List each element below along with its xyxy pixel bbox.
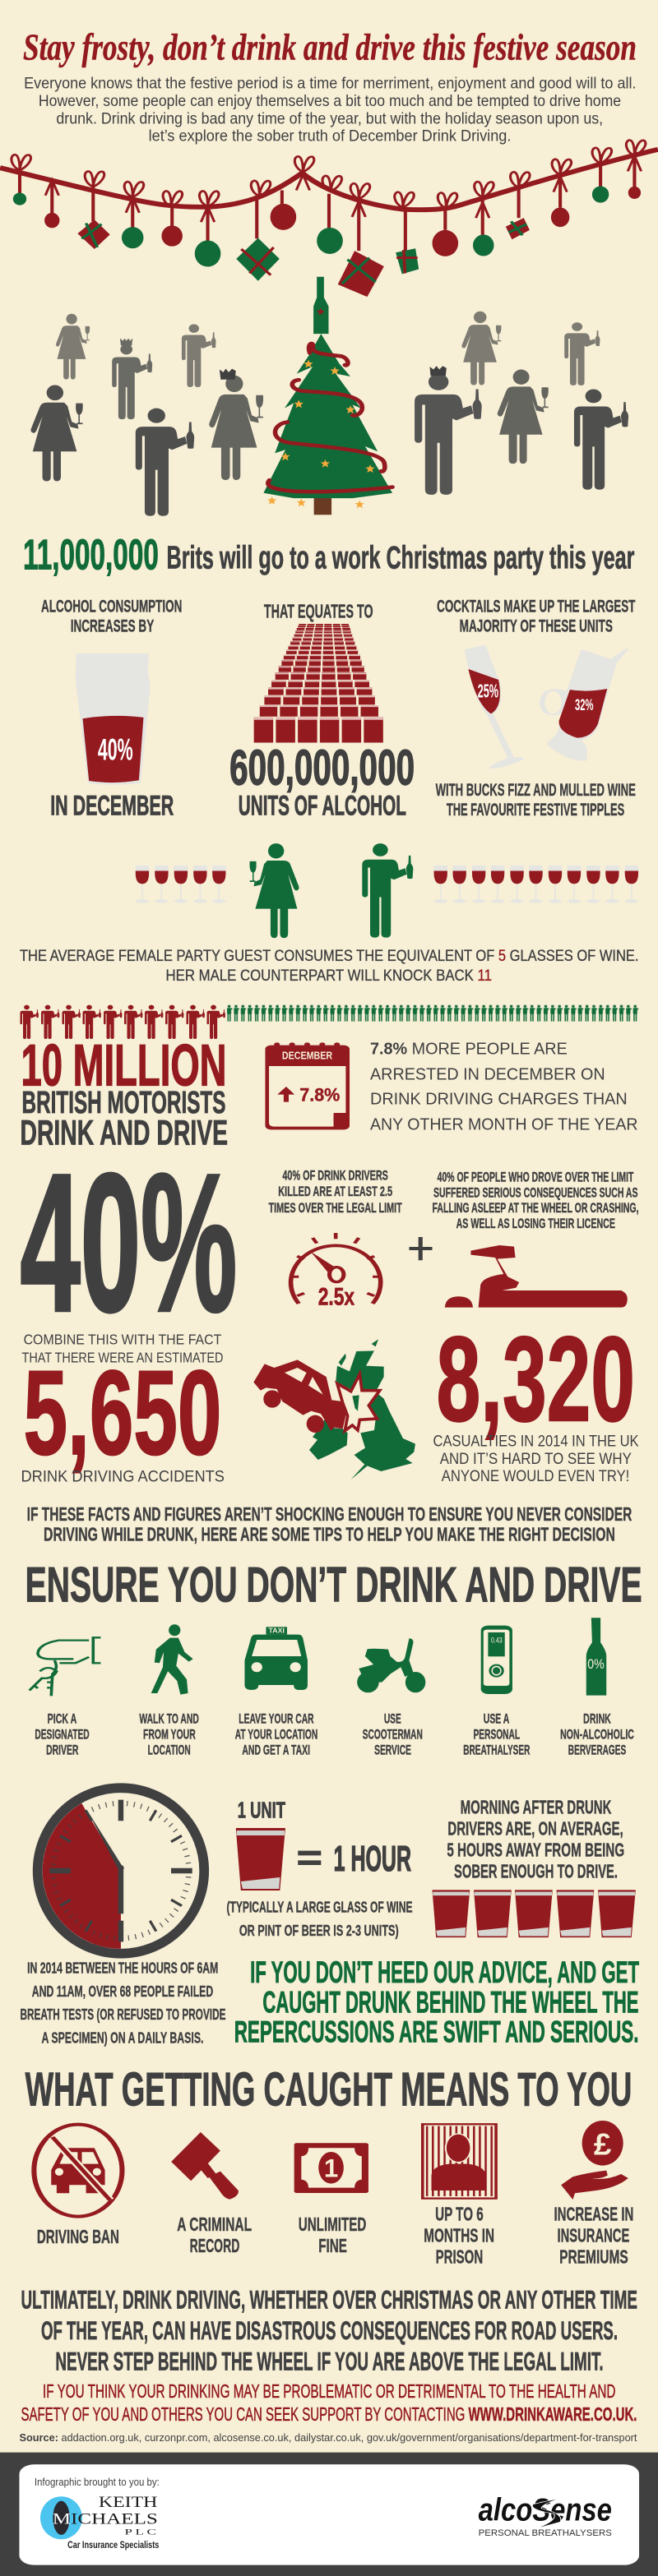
panel: clock and units: (TYPICALLY A LARGE GLASS OF WINE (227, 1899, 413, 1916)
row of 5 glasses (433, 1890, 636, 1937)
1 unit equals 1 hour: 1 UNIT (238, 1798, 285, 1823)
logo: Keith Michaels: MICHAELS (53, 2510, 158, 2528)
footer: Infographic brought to you by: (35, 2477, 160, 2488)
combine text: COMBINE THIS WITH THE FACT (24, 1331, 221, 1347)
tip: breathalyser (463, 1626, 531, 1757)
icon: insurance premium: £ (594, 2128, 611, 2162)
40% consequences text (433, 1170, 639, 1231)
panel: clock and units: IN 2014 BETWEEN THE HOURS OF 6AM (27, 1960, 218, 1977)
panel: consequences captions and closing: MONTHS IN (424, 2225, 494, 2246)
panel: consequences captions and closing: DRIVING BAN (37, 2227, 119, 2247)
column: alcohol consumption pint: INCREASES BY (71, 616, 154, 635)
people row: 10 million red, rest green (20, 1005, 639, 1039)
column: alcohol consumption pint: 40% (98, 732, 133, 766)
panel: party statistics (20, 531, 639, 985)
arrested text block: 7.8% MORE PEOPLE ARE (370, 1039, 568, 1058)
caption: unlimited fine (299, 2214, 366, 2256)
grid of cups (254, 625, 384, 730)
column: 600,000,000 units cups: THAT EQUATES TO (264, 602, 373, 622)
icon: december calendar: DECEMBER (282, 1050, 332, 1062)
icon: december calendar (265, 1042, 350, 1129)
footer: Car Insurance Specialists (67, 2540, 159, 2551)
panel: consequences captions and closing: A CRIMINAL (177, 2214, 252, 2235)
panel: clock and units: AND 11AM, OVER 68 PEOPLE FAILED (32, 1983, 213, 2001)
tip: scooterman (357, 1638, 425, 1757)
map: car crashing into the UK (253, 1339, 415, 1480)
logo: Keith Michaels (40, 2494, 159, 2551)
icon: driving ban (34, 2125, 122, 2217)
panel: header and garland (0, 26, 658, 516)
tip: breathalyser: 0.43 (491, 1636, 503, 1645)
panel: motorist statistics: 5,650 (24, 1346, 221, 1480)
guest figures (30, 312, 628, 516)
panel: consequences captions and closing: UNLIMITED (299, 2214, 366, 2235)
panel: tips: AT YOUR LOCATION (235, 1727, 317, 1742)
panel: motorist statistics: 10 MILLION (21, 1032, 227, 1098)
transition statement (27, 1504, 632, 1545)
intro text block: let’s explore the sober truth of December Drink Driving. (149, 127, 511, 145)
panel: tips: SCOOTERMAN (363, 1727, 423, 1742)
panel: clock and units (20, 1788, 639, 2217)
tip: taxi (235, 1627, 317, 1757)
accidents caption: DRINK DRIVING ACCIDENTS (21, 1467, 225, 1485)
tip: taxi: TAXI (269, 1627, 285, 1635)
panel: motorist statistics: BRITISH MOTORISTS (22, 1084, 225, 1119)
panel: tips (25, 1504, 642, 1757)
headline 11,000,000 Brits: 11,000,000 (23, 531, 159, 579)
column: alcohol consumption pint (41, 596, 182, 822)
caption: prison: UP TO 6 (435, 2204, 484, 2225)
plus sign (409, 1237, 433, 1260)
panel: motorist statistics (20, 1005, 639, 1485)
panel: tips: WALK TO AND (139, 1711, 199, 1726)
column: cocktails glasses (436, 596, 636, 819)
column: cocktails glasses: 32% (575, 696, 594, 714)
clock caption (20, 1960, 225, 2047)
tip: designated driver: DRIVER (46, 1743, 79, 1757)
panel: clock and units: A SPECIMEN) ON A DAILY BASIS. (42, 2029, 203, 2047)
tip: non-alcoholic drink (560, 1618, 634, 1757)
combine text (22, 1331, 223, 1365)
icon: banknote (294, 2143, 368, 2193)
panel: tips: BREATHALYSER (463, 1743, 531, 1757)
caption: criminal record (177, 2214, 252, 2256)
panel: tips: LOCATION (148, 1743, 191, 1757)
panel: motorist statistics: DRINK AND DRIVE (20, 1113, 228, 1152)
morning after text (447, 1798, 624, 1882)
caption: unlimited fine: FINE (318, 2236, 347, 2256)
christmas tree with bottle top (263, 277, 392, 515)
tip: non-alcoholic drink: 0% (587, 1656, 605, 1672)
panel: clock and units: OR PINT OF BEER IS 2-3 UNITS) (239, 1923, 399, 1940)
tip: walk (139, 1624, 199, 1757)
panel: motorist statistics: 40% OF DRINK DRIVERS (282, 1168, 388, 1183)
panel: tips: DESIGNATED (35, 1727, 90, 1742)
icon: prison (423, 2124, 496, 2199)
garland of baubles and gifts (0, 140, 658, 297)
caption: insurance (554, 2204, 633, 2268)
caption: criminal record: RECORD (190, 2236, 239, 2256)
male guest with 11 glasses (362, 843, 638, 938)
panel: tips: PERSONAL (474, 1727, 520, 1742)
footer (0, 2453, 658, 2576)
tip: breathalyser: USE A (484, 1711, 509, 1726)
crash burst (337, 1374, 380, 1431)
column: 600,000,000 units cups (229, 602, 415, 822)
panel: motorist statistics: 40% (20, 1133, 237, 1352)
caption: prison (424, 2204, 494, 2268)
panel: consequences captions and closing (0, 2204, 658, 2576)
casualties caption (433, 1433, 639, 1485)
logo: alcoSense (479, 2491, 612, 2538)
clock 6am to 11am (38, 1788, 204, 1954)
panel: motorist statistics: KILLED ARE AT LEAST 2.5 (278, 1184, 392, 1199)
caption: prison: PRISON (436, 2246, 483, 2268)
icon: banknote: 1 (324, 2154, 338, 2182)
support message (21, 2381, 637, 2425)
female guest with 5 glasses (136, 843, 299, 938)
green warning statement (234, 1955, 639, 2049)
icon: speedometer 2.5x: 2.5x (318, 1283, 354, 1311)
panel: motorist statistics: TIMES OVER THE LEGAL LIMIT (269, 1201, 402, 1216)
panel: tips: LEAVE YOUR CAR (239, 1711, 314, 1726)
tip: designated driver: PICK A (48, 1711, 76, 1726)
10 million heading (20, 1032, 228, 1152)
tip: scooterman: SERVICE (374, 1743, 411, 1757)
headline 11,000,000 Brits (23, 531, 634, 579)
column: cocktails glasses: 25% (478, 681, 498, 702)
icon: person asleep (445, 1245, 628, 1308)
panel: tips: AND GET A TAXI (242, 1743, 310, 1757)
panel: party statistics: 600,000,000 (229, 741, 415, 796)
intro text block (24, 75, 636, 145)
icon: insurance premium (561, 2121, 628, 2200)
panel: clock and units: BREATH TESTS (OR REFUSED TO PROVIDE (20, 2006, 225, 2024)
logo: Keith Michaels: P L C (125, 2528, 156, 2537)
icon: gavel (171, 2132, 239, 2200)
panel: party statistics: IN DECEMBER (50, 791, 174, 822)
tip: scooterman: USE (384, 1711, 401, 1726)
panel: tips: FROM YOUR (143, 1727, 196, 1742)
car (253, 1360, 347, 1433)
illustration: guests around bottle christmas tree (30, 277, 628, 516)
tip: non-alcoholic drink: DRINK (583, 1711, 611, 1726)
panel: party statistics: ALCOHOL CONSUMPTION (41, 596, 182, 616)
icon: december calendar: 7.8% (299, 1085, 340, 1106)
panel: clock and units: 1 HOUR (334, 1839, 411, 1878)
UK and Ireland map (309, 1339, 415, 1480)
logo: Keith Michaels: KEITH (99, 2494, 157, 2511)
40% limit text (269, 1168, 402, 1216)
arrested text block (370, 1039, 638, 1133)
closing statement (21, 2285, 637, 2376)
glasses caption (20, 947, 639, 985)
icon: speedometer 2.5x (291, 1233, 381, 1311)
combine text: THAT THERE WERE AN ESTIMATED (22, 1349, 223, 1365)
tip: designated driver (30, 1637, 100, 1757)
panel: party statistics: UNITS OF ALCOHOL (239, 791, 406, 822)
1 unit equals 1 hour (227, 1798, 413, 1940)
